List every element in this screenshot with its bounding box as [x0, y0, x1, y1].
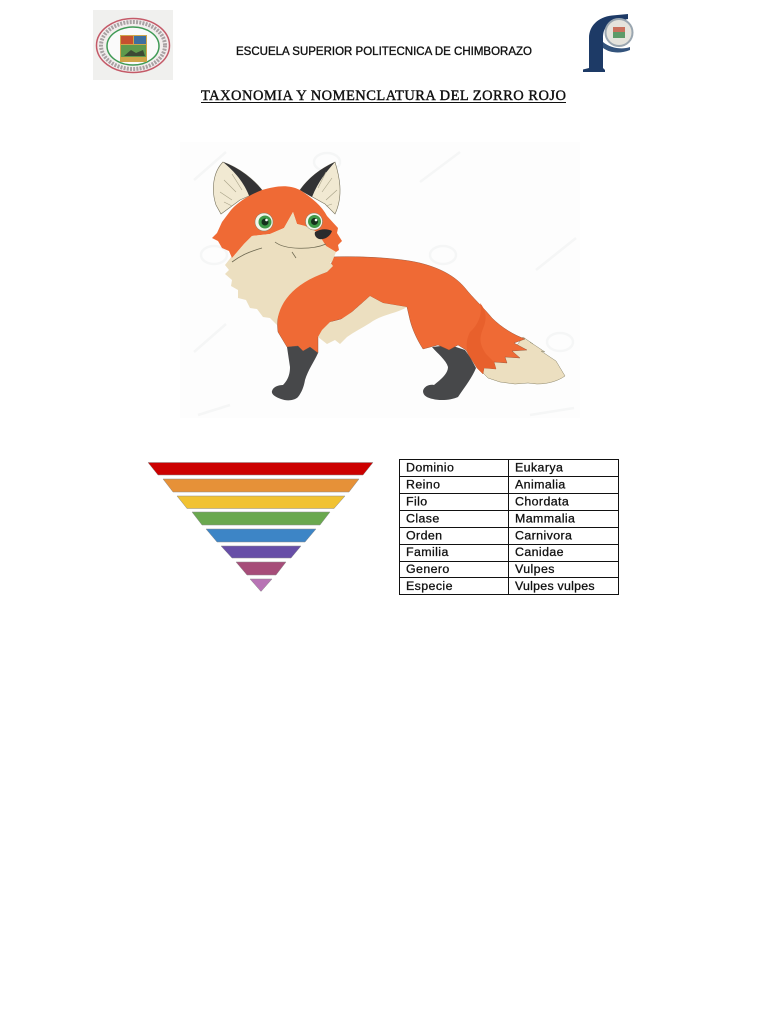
belly: [318, 296, 407, 344]
level 4 clase: [192, 512, 330, 525]
chest fur: [225, 236, 336, 325]
front leg: [272, 346, 318, 400]
table: taxonomic classification: Vulpes vulpes: [515, 579, 595, 593]
mouth: [232, 242, 326, 262]
table: taxonomic classification: Carnivora: [515, 528, 572, 542]
table: taxonomic classification: Mammalia: [515, 512, 575, 526]
table: taxonomic classification: Vulpes: [515, 562, 555, 576]
illustration: red fox: [180, 142, 580, 418]
tail tip: [478, 337, 565, 384]
level 2 reino: [163, 479, 359, 492]
table: taxonomic classification: Canidae: [515, 545, 564, 559]
left eye: [255, 213, 273, 231]
header: school name: ESCUELA SUPERIOR POLITECNICA DE CHIMBORAZO: [236, 46, 532, 58]
table: taxonomic classification: Animalia: [515, 478, 566, 492]
table: taxonomic classification: Filo: [406, 494, 428, 508]
hind leg: [423, 345, 476, 400]
nose: [315, 229, 332, 239]
table: taxonomic classification: Chordata: [515, 494, 569, 508]
right ear: [300, 162, 340, 214]
icon: faculty logo: [583, 14, 632, 72]
face: [232, 212, 336, 262]
level 7 genero: [236, 562, 286, 575]
head: [212, 186, 342, 258]
level 3 filo: [177, 496, 345, 508]
level 8 especie: [250, 579, 272, 592]
watermarks: [194, 152, 576, 415]
table: taxonomic classification: Familia: [406, 545, 449, 559]
level 5 orden: [206, 529, 316, 542]
table: taxonomic classification: Especie: [406, 579, 453, 593]
table: taxonomic classification: Reino: [406, 478, 440, 492]
level 1 dominio: [148, 462, 373, 475]
table: taxonomic classification: Genero: [406, 562, 450, 576]
table: taxonomic classification: Eukarya: [515, 460, 563, 474]
right eye: [306, 213, 322, 230]
table: taxonomic classification: Clase: [406, 512, 440, 526]
icon: school seal logo: [93, 10, 173, 80]
level 6 familia: [221, 546, 301, 558]
table: taxonomic classification: Dominio: [406, 460, 454, 474]
left ear: [213, 162, 262, 214]
table: taxonomic classification: Orden: [406, 528, 442, 542]
chart: taxonomy inverted pyramid: [148, 462, 373, 592]
title: TAXONOMIA Y NOMENCLATURA DEL ZORRO ROJO: [201, 88, 566, 104]
table: taxonomic classification: [400, 460, 618, 594]
body and tail: [277, 257, 527, 374]
